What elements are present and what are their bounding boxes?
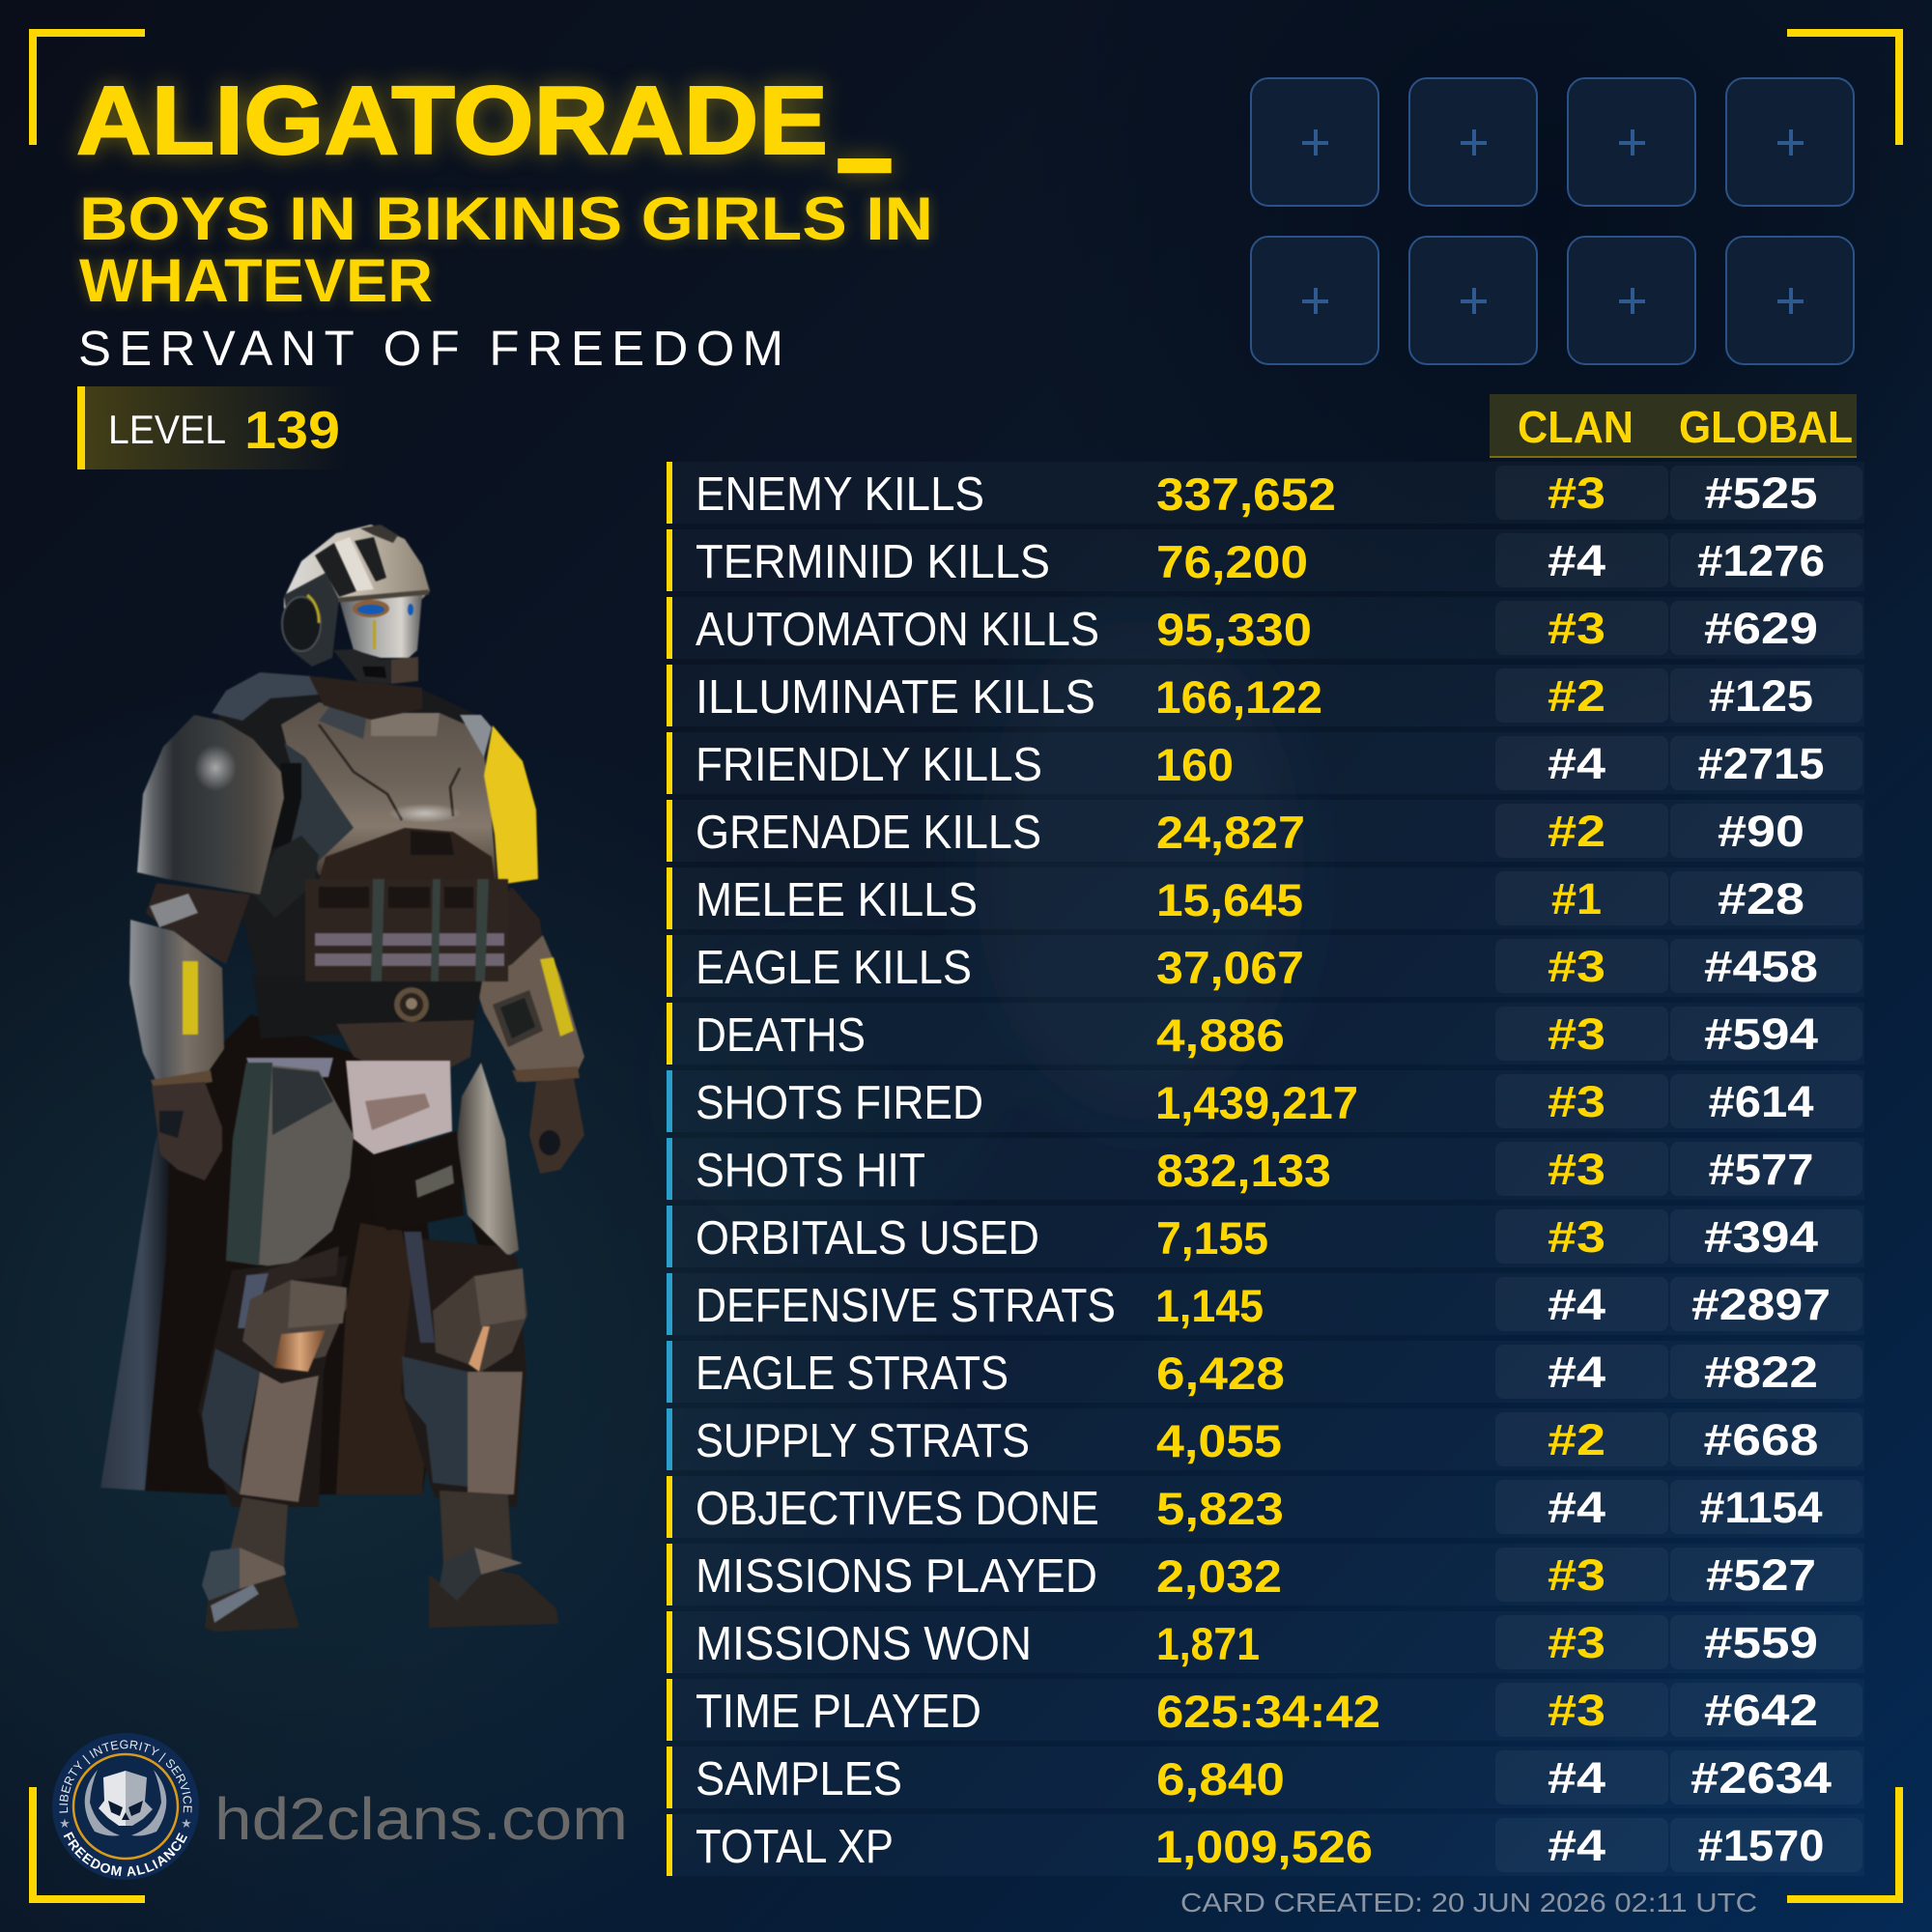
row: terminid kills: 76,200 <box>1156 536 1308 587</box>
row: total xp <box>667 1814 1864 1876</box>
slot 6 <box>1409 237 1537 364</box>
row: melee kills: 15,645 <box>1156 874 1303 925</box>
laurel wreath <box>85 1770 166 1835</box>
row: shots hit: #3 <box>1548 1145 1605 1194</box>
slot 7 <box>1568 237 1695 364</box>
right arm <box>474 887 584 1174</box>
row: friendly kills <box>667 732 1864 794</box>
grey pauldron <box>137 715 284 895</box>
row: eagle strats: 6,428 <box>1156 1348 1285 1399</box>
star left: ★ <box>59 1816 71 1831</box>
row: shots hit: 832,133 <box>1156 1145 1331 1196</box>
chest plate <box>269 698 497 881</box>
neck collar <box>309 676 422 720</box>
row: orbitals used <box>667 1206 1864 1267</box>
player name: ALIGATORADE <box>76 67 828 175</box>
row: missions played <box>667 1544 1864 1605</box>
row: grenade kills <box>667 800 1864 862</box>
row: enemy kills <box>667 462 1864 524</box>
slot 4 <box>1726 78 1854 206</box>
row: shots fired: #3 <box>1548 1077 1605 1126</box>
motto: LIBERTY | INTEGRITY | SERVICE <box>59 1740 192 1813</box>
row: enemy kills: 337,652 <box>1156 469 1336 520</box>
row: supply strats: SUPPLY STRATS <box>696 1415 1030 1467</box>
row: objectives done: OBJECTIVES DONE <box>696 1483 1099 1535</box>
row: defensive strats: DEFENSIVE STRATS <box>696 1280 1116 1332</box>
row: illuminate kills: ILLUMINATE KILLS <box>696 671 1095 724</box>
right knee <box>433 1268 527 1372</box>
row: grenade kills: 24,827 <box>1156 807 1305 858</box>
row: time played: #3 <box>1548 1686 1605 1735</box>
helmet <box>282 525 430 684</box>
row: deaths: #594 <box>1704 1009 1818 1059</box>
stats table <box>667 462 1864 1876</box>
left arm <box>129 883 250 1180</box>
table header <box>1490 394 1857 458</box>
right shin <box>402 1356 523 1496</box>
row: enemy kills: #525 <box>1704 469 1818 518</box>
row: missions won: MISSIONS WON <box>696 1618 1032 1670</box>
row: illuminate kills <box>667 665 1864 726</box>
player name <box>76 0 890 186</box>
row: objectives done: 5,823 <box>1156 1483 1284 1534</box>
row: automaton kills: 95,330 <box>1156 604 1312 655</box>
clan name: BOYS IN BIKINIS GIRLS IN <box>79 185 933 253</box>
row: automaton kills: #629 <box>1704 604 1818 653</box>
row: orbitals used: ORBITALS USED <box>696 1212 1039 1264</box>
row: automaton kills: AUTOMATON KILLS <box>696 604 1099 656</box>
row: total xp: 1,009,526 <box>1155 1821 1373 1872</box>
row: total xp: TOTAL XP <box>696 1821 894 1873</box>
row: eagle strats: #822 <box>1704 1348 1818 1397</box>
clan logo: freedom alliance <box>52 1733 199 1880</box>
row: objectives done: #1154 <box>1700 1483 1822 1532</box>
row: missions played: #3 <box>1548 1550 1605 1600</box>
row: missions won: 1,871 <box>1156 1618 1260 1669</box>
row: eagle kills: #458 <box>1704 942 1818 991</box>
star right: ★ <box>181 1816 192 1831</box>
row: melee kills: MELEE KILLS <box>696 874 978 926</box>
armored helldiver figure <box>100 525 584 1632</box>
row: samples: 6,840 <box>1156 1753 1285 1804</box>
clan name <box>79 185 933 315</box>
corner bracket: bottom left <box>29 1787 145 1903</box>
lower torso <box>246 976 483 1154</box>
row: friendly kills: #2715 <box>1698 739 1824 788</box>
leg backing <box>198 1241 526 1507</box>
row: defensive strats: #4 <box>1548 1280 1605 1329</box>
row: terminid kills: #4 <box>1548 536 1605 585</box>
row: supply strats <box>667 1408 1864 1470</box>
row: total xp: #4 <box>1548 1821 1605 1870</box>
row: eagle kills: EAGLE KILLS <box>696 942 972 994</box>
left shin <box>202 1349 319 1502</box>
row: supply strats: #2 <box>1548 1415 1605 1464</box>
alliance name: FREEDOM ALLIANCE <box>64 1832 187 1876</box>
website: hd2clans.com <box>214 1786 628 1852</box>
row: samples: SAMPLES <box>696 1753 902 1805</box>
row: samples: #4 <box>1548 1753 1605 1803</box>
torso backing <box>217 676 507 995</box>
corner bracket: top right <box>1787 29 1903 145</box>
left knee <box>242 1280 347 1372</box>
row: supply strats: #668 <box>1704 1415 1818 1464</box>
row: time played: #642 <box>1704 1686 1818 1735</box>
yellow pauldron <box>484 725 538 885</box>
cables over shoulder <box>212 672 319 721</box>
level badge: LEVEL <box>108 407 226 452</box>
row: terminid kills: #1276 <box>1697 536 1825 585</box>
row: automaton kills <box>667 597 1864 659</box>
row: missions played: MISSIONS PLAYED <box>696 1550 1097 1603</box>
skull buckle <box>394 987 429 1022</box>
table header: GLOBAL <box>1679 402 1853 452</box>
player title: SERVANT OF FREEDOM <box>78 321 783 376</box>
row: eagle strats: #4 <box>1548 1348 1605 1397</box>
row: shots hit: #577 <box>1708 1145 1814 1194</box>
row: eagle strats: EAGLE STRATS <box>696 1348 1009 1400</box>
row: time played: TIME PLAYED <box>696 1686 981 1738</box>
row: shots fired <box>667 1070 1864 1132</box>
corner bracket: top left <box>29 29 145 145</box>
medal slots grid <box>1251 78 1854 364</box>
row: objectives done <box>667 1476 1864 1538</box>
row: deaths <box>667 1003 1864 1065</box>
row: grenade kills: GRENADE KILLS <box>696 807 1041 859</box>
slot 3 <box>1568 78 1695 206</box>
row: eagle kills: 37,067 <box>1156 942 1304 993</box>
row: shots fired: 1,439,217 <box>1155 1077 1358 1128</box>
row: missions played: #527 <box>1706 1550 1816 1600</box>
row: automaton kills: #3 <box>1548 604 1605 653</box>
slot 2 <box>1409 78 1537 206</box>
row: total xp: #1570 <box>1698 1821 1824 1870</box>
table header: CLAN <box>1518 402 1634 452</box>
row: deaths: DEATHS <box>696 1009 866 1062</box>
slot 8 <box>1726 237 1854 364</box>
row: time played: 625:34:42 <box>1156 1686 1380 1737</box>
row: melee kills: #1 <box>1551 874 1602 923</box>
row: friendly kills: #4 <box>1548 739 1605 788</box>
row: deaths: 4,886 <box>1156 1009 1285 1061</box>
row: grenade kills: #2 <box>1548 807 1605 856</box>
row: illuminate kills: #125 <box>1709 671 1813 721</box>
row: missions won: #3 <box>1548 1618 1605 1667</box>
level badge <box>77 386 348 469</box>
row: illuminate kills: #2 <box>1548 671 1605 721</box>
row: melee kills <box>667 867 1864 929</box>
row: enemy kills: #3 <box>1548 469 1605 518</box>
row: defensive strats: #2897 <box>1691 1280 1831 1329</box>
row: terminid kills: TERMINID KILLS <box>696 536 1050 588</box>
row: missions played: 2,032 <box>1156 1550 1282 1602</box>
left hip plate <box>226 1063 354 1268</box>
row: samples <box>667 1747 1864 1808</box>
clan name: WHATEVER <box>79 247 433 315</box>
row: samples: #2634 <box>1690 1753 1832 1803</box>
cape <box>100 1014 517 1495</box>
level badge: 139 <box>244 400 340 460</box>
row: time played <box>667 1679 1864 1741</box>
row: missions won: #559 <box>1704 1618 1818 1667</box>
right hip plate <box>457 1063 519 1256</box>
row: orbitals used: #3 <box>1548 1212 1605 1262</box>
row: grenade kills: #90 <box>1718 807 1804 856</box>
right boot <box>429 1491 558 1628</box>
ammo pouches <box>305 879 508 981</box>
row: defensive strats <box>667 1273 1864 1335</box>
slot 5 <box>1251 237 1378 364</box>
skull <box>99 1771 153 1826</box>
row: friendly kills: FRIENDLY KILLS <box>696 739 1042 791</box>
row: orbitals used: #394 <box>1704 1212 1818 1262</box>
row: eagle kills <box>667 935 1864 997</box>
slot 1 <box>1251 78 1378 206</box>
row: deaths: #3 <box>1548 1009 1605 1059</box>
row: defensive strats: 1,145 <box>1155 1280 1264 1331</box>
silver shoulder behind <box>460 715 492 757</box>
row: shots fired: SHOTS FIRED <box>696 1077 983 1129</box>
row: missions won <box>667 1611 1864 1673</box>
row: terminid kills <box>667 529 1864 591</box>
card created timestamp: CARD CREATED: 20 JUN 2026 02:11 UTC <box>1180 1888 1757 1918</box>
row: eagle strats <box>667 1341 1864 1403</box>
thigh strap <box>371 1131 464 1231</box>
row: supply strats: 4,055 <box>1156 1415 1282 1466</box>
row: orbitals used: 7,155 <box>1156 1212 1268 1264</box>
row: shots hit: SHOTS HIT <box>696 1145 925 1197</box>
corner bracket: bottom right <box>1787 1787 1903 1903</box>
row: friendly kills: 160 <box>1155 739 1234 790</box>
row: eagle kills: #3 <box>1548 942 1605 991</box>
left boot <box>202 1497 298 1632</box>
row: melee kills: #28 <box>1718 874 1804 923</box>
row: shots fired: #614 <box>1708 1077 1814 1126</box>
row: objectives done: #4 <box>1548 1483 1605 1532</box>
row: shots hit <box>667 1138 1864 1200</box>
thighs <box>238 1232 516 1343</box>
row: illuminate kills: 166,122 <box>1155 671 1322 723</box>
row: enemy kills: ENEMY KILLS <box>696 469 984 521</box>
strap buckle <box>253 836 319 918</box>
